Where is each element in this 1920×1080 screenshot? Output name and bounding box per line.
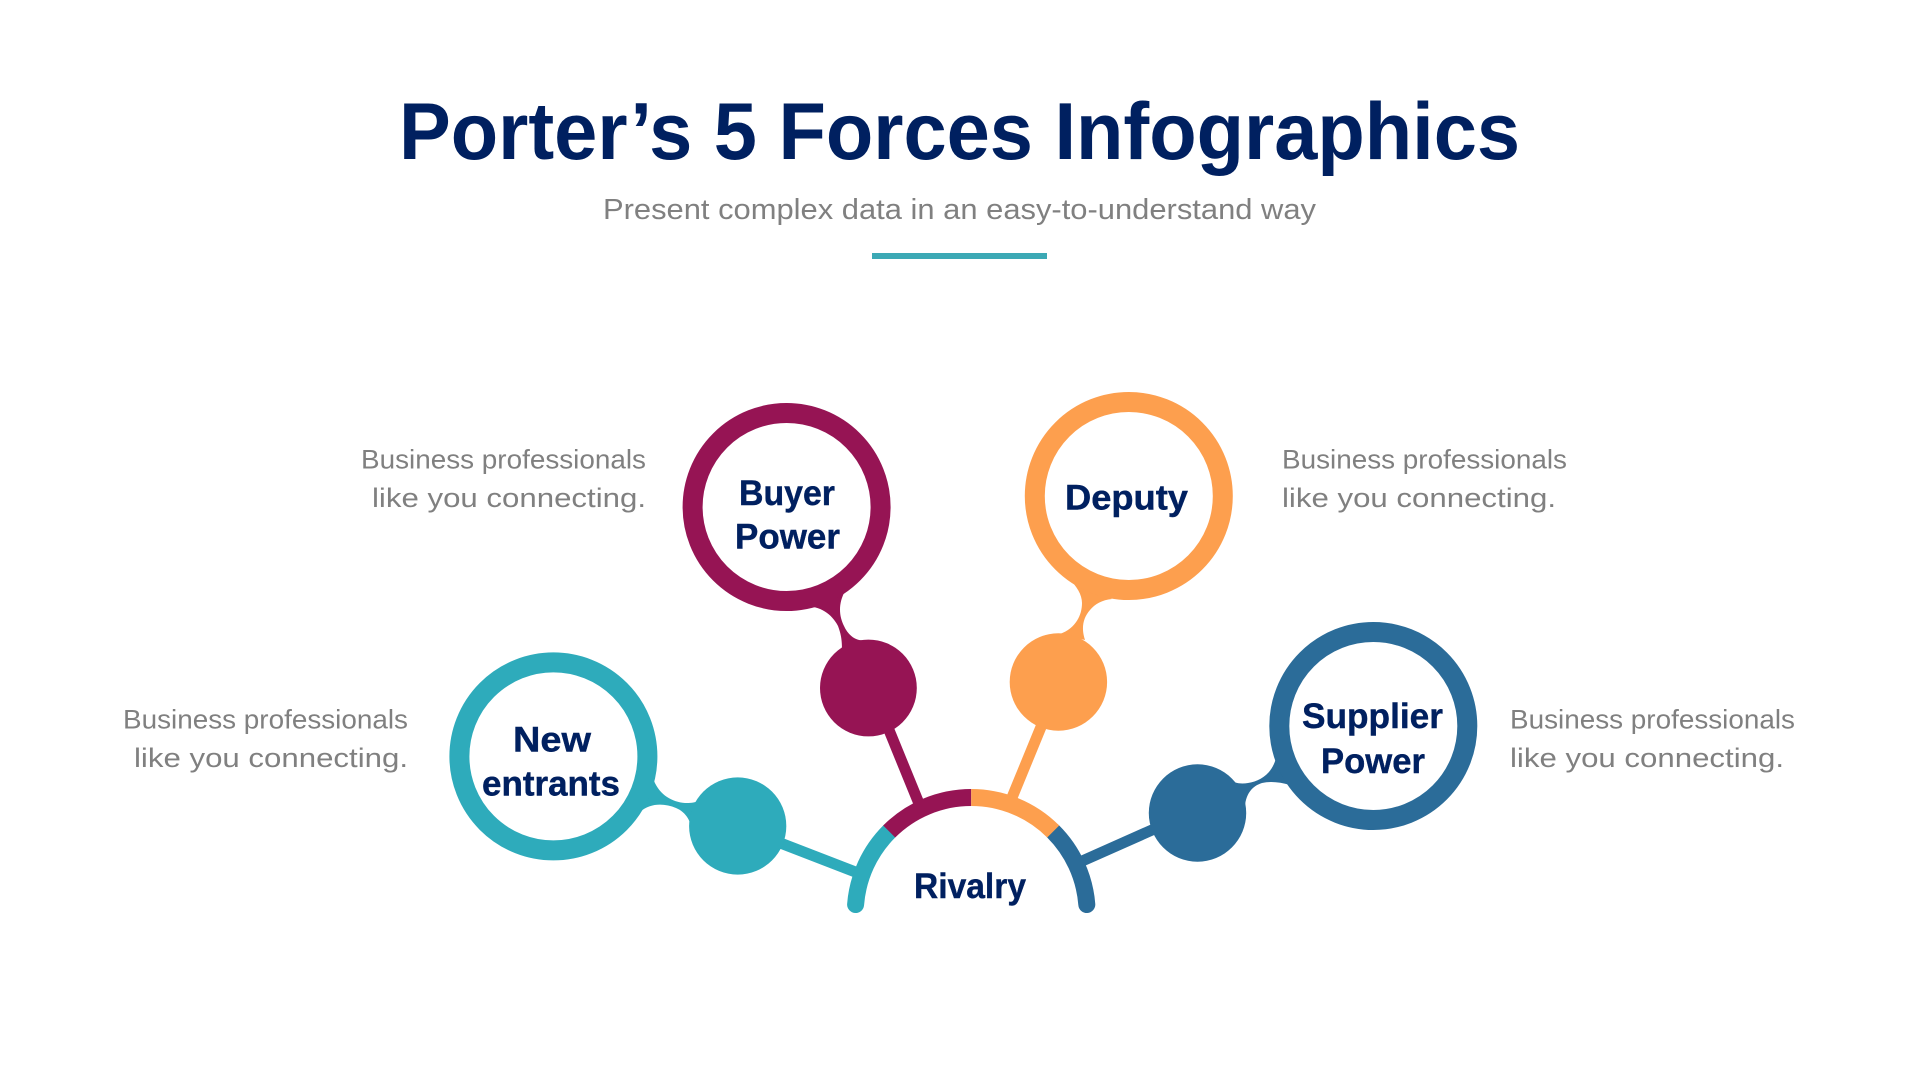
label: supplier power: Supplier: [1302, 697, 1443, 736]
label: rivalry: Rivalry: [914, 867, 1027, 906]
arc segment: orange: [971, 798, 1053, 832]
description: supplier power: Business professionals: [1510, 705, 1795, 735]
neck: new entrants: [640, 781, 698, 834]
connector line: buyer power to rivalry: [880, 708, 920, 806]
arc segment: teal: [856, 832, 889, 904]
ring: deputy: [1035, 402, 1223, 590]
description: deputy: like you connecting.: [1282, 483, 1556, 513]
label: new entrants: New: [513, 720, 592, 759]
force: deputy: [1010, 402, 1223, 800]
node dot: deputy: [1010, 633, 1107, 731]
label: supplier power: Power: [1321, 742, 1425, 781]
subtitle: Present complex data in an easy-to-understand way: [603, 194, 1317, 226]
node dot: supplier power: [1149, 764, 1246, 862]
ring: new entrants: [459, 662, 647, 850]
description: buyer power: Business professionals: [361, 445, 646, 475]
ring: supplier power: [1279, 632, 1467, 820]
label: deputy: Deputy: [1065, 478, 1189, 517]
description: buyer power: like you connecting.: [372, 483, 646, 513]
neck: buyer power: [805, 591, 866, 650]
force: buyer power: [693, 413, 920, 806]
title: Porter’s 5 Forces Infographics: [399, 87, 1520, 177]
connector line: new entrants to rivalry: [770, 839, 858, 873]
arc segment: maroon: [889, 798, 971, 832]
arc segment: blue: [1053, 832, 1087, 904]
label: buyer power: Power: [735, 518, 840, 557]
ring: buyer power: [693, 413, 881, 601]
label: new entrants: entrants: [482, 764, 620, 803]
force: supplier power: [1080, 632, 1467, 862]
title underline: [872, 253, 1047, 259]
description: deputy: Business professionals: [1282, 445, 1567, 475]
node dot: new entrants: [689, 777, 786, 875]
neck: deputy: [1060, 578, 1112, 640]
force: new entrants: [459, 662, 858, 875]
node dot: buyer power: [820, 640, 917, 736]
description: new entrants: Business professionals: [123, 705, 408, 735]
neck: supplier power: [1228, 758, 1290, 812]
connector line: deputy to rivalry: [1011, 705, 1050, 800]
rivalry arc: [856, 798, 1087, 904]
label: buyer power: Buyer: [739, 474, 835, 513]
description: supplier power: like you connecting.: [1510, 743, 1784, 773]
connector line: supplier power to rivalry: [1080, 822, 1170, 862]
description: new entrants: like you connecting.: [134, 743, 408, 773]
